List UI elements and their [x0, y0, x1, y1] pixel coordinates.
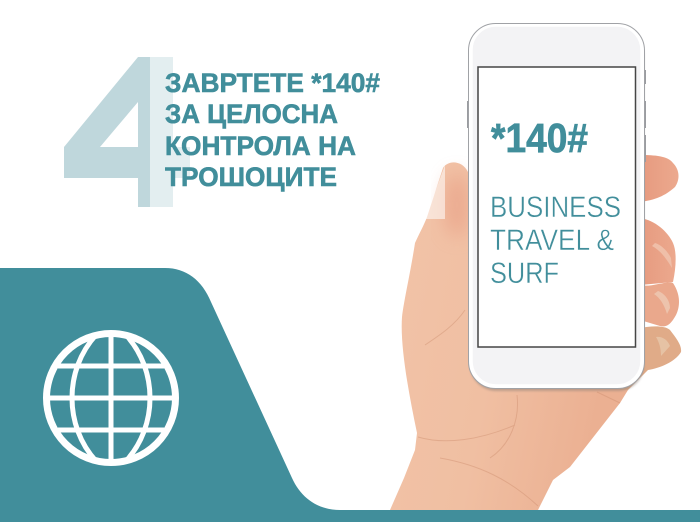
- phone: [467, 24, 646, 391]
- title: ЗА ЦЕЛОСНА: [165, 99, 338, 129]
- finger 1: [640, 155, 679, 202]
- phone shadow: [470, 30, 644, 391]
- title: ТРОШОЦИТЕ: [165, 162, 337, 192]
- finger 2: [640, 218, 676, 285]
- finger 4: [620, 326, 681, 390]
- fingernails: [654, 291, 670, 314]
- title: [165, 68, 380, 192]
- screen text: *140#: [491, 115, 588, 161]
- palm and thumb: [390, 162, 628, 510]
- screen text: TRAVEL &: [490, 224, 614, 257]
- side buttons: [467, 70, 646, 162]
- palm creases: [418, 310, 620, 506]
- large numeral 4: [64, 57, 190, 207]
- thumb shading: [444, 173, 470, 237]
- title: КОНТРОЛА НА: [165, 131, 356, 161]
- thumb highlight overlay: [425, 165, 445, 219]
- title: ЗАВРТЕТЕ *140#: [165, 68, 380, 98]
- phone body: [468, 24, 644, 388]
- hand holding phone: [390, 155, 681, 510]
- screen text: SURF: [490, 257, 559, 290]
- screen text: BUSINESS: [490, 191, 621, 224]
- icon: globe: [46, 332, 176, 464]
- finger 3: [640, 282, 679, 326]
- screen text: [490, 115, 621, 290]
- teal background panel: [0, 268, 700, 522]
- phone bezel: [472, 26, 641, 385]
- screen: [478, 67, 636, 347]
